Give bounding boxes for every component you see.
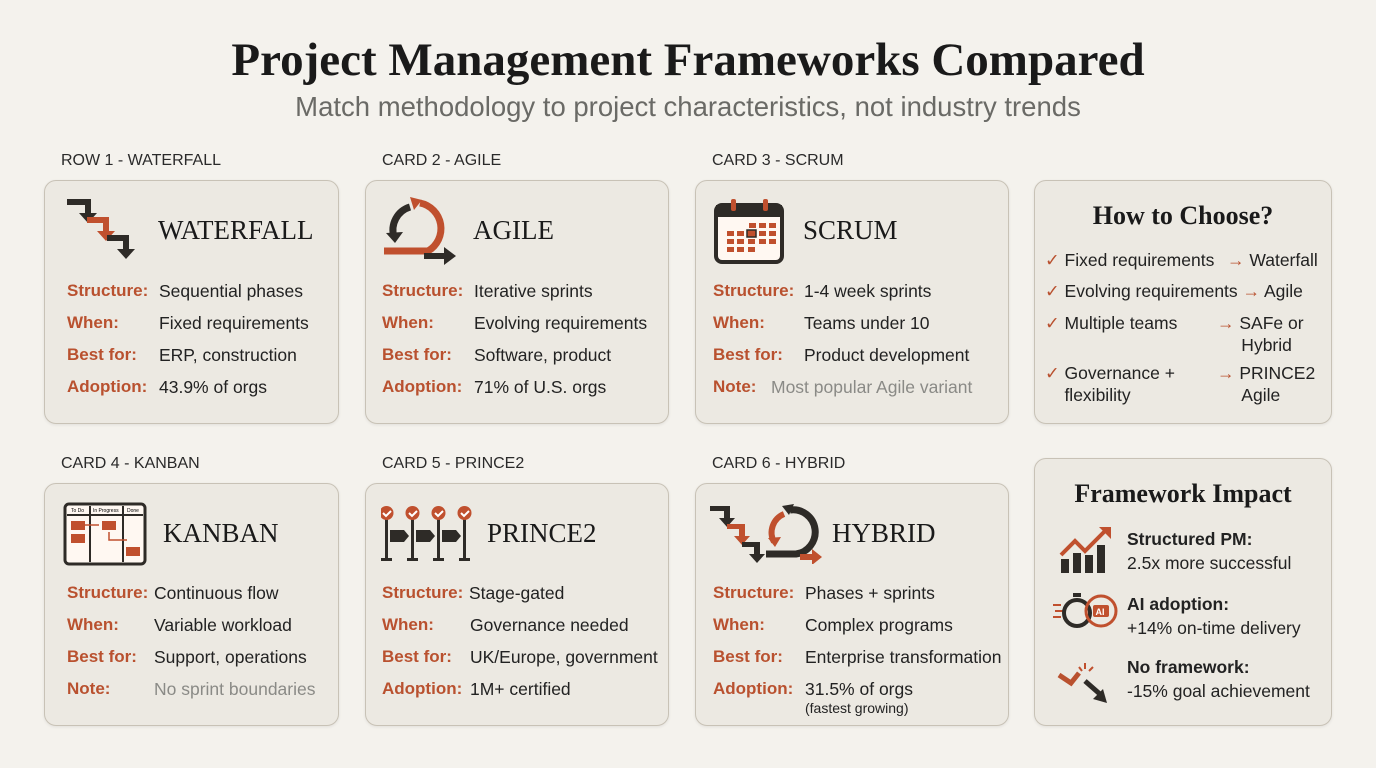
panel: hybrid: Adoption: (713, 679, 793, 698)
label: card 2: CARD 2 - AGILE (382, 152, 501, 169)
icon: calendar (714, 199, 784, 264)
panel: kanban: Best for: (67, 647, 137, 666)
card title: AGILE (473, 215, 554, 245)
panel: agile: Best for: (382, 345, 452, 364)
panel: prince2: UK/Europe, government (470, 647, 658, 667)
panel: scrum: Teams under 10 (804, 313, 930, 333)
panel: scrum: Best for: (713, 345, 783, 364)
panel: framework impact (1034, 458, 1332, 726)
panel: hybrid: Complex programs (805, 615, 953, 635)
panel: kanban: Support, operations (154, 647, 307, 667)
panel: how to choose: ✓ Evolving requirements → Agile (1045, 281, 1303, 301)
panel: prince2: Governance needed (470, 615, 629, 635)
panel: hybrid: (fastest growing) (805, 700, 908, 716)
panel: scrum: 1-4 week sprints (804, 281, 931, 301)
card title: HYBRID (832, 518, 936, 548)
panel: scrum: Most popular Agile variant (771, 377, 972, 397)
panel: how to choose: → Waterfall (1227, 250, 1318, 270)
panel: agile: Adoption: (382, 377, 462, 396)
label: card 3: CARD 3 - SCRUM (712, 152, 844, 169)
heading: How to Choose? (1093, 201, 1273, 230)
stat: ai adoption (1127, 594, 1301, 638)
label: card 5: CARD 5 - PRINCE2 (382, 455, 524, 472)
card title: PRINCE2 (487, 518, 597, 548)
panel: hybrid: Enterprise transformation (805, 647, 1001, 667)
panel: how to choose: → SAFe or (1217, 313, 1304, 333)
panel: kanban: Note: (67, 679, 110, 698)
panel: hybrid (695, 483, 1009, 726)
rows (67, 281, 303, 301)
icon: stage gates (381, 506, 472, 561)
title: Project Management Frameworks Compared (231, 34, 1145, 86)
panel: waterfall: Structure: (67, 281, 148, 300)
label: row 1: ROW 1 - WATERFALL (61, 152, 221, 169)
panel: hybrid: Structure: (713, 583, 794, 602)
card title: KANBAN (163, 518, 279, 548)
icon: agile cycle (384, 197, 456, 265)
panel: how to choose: ✓ Governance + (1045, 363, 1175, 383)
panel: agile (365, 180, 669, 424)
label: card 6: CARD 6 - HYBRID (712, 455, 845, 472)
panel: waterfall: When: (67, 313, 119, 332)
choice rows: ✓ Fixed requirements (1045, 250, 1214, 270)
panel: prince2: Structure: (382, 583, 463, 602)
panel: hybrid: When: (713, 615, 765, 634)
icon: stopwatch AI (1053, 593, 1118, 628)
panel: waterfall: Adoption: (67, 377, 147, 396)
panel: how to choose: flexibility (1064, 385, 1131, 405)
panel: scrum: When: (713, 313, 765, 332)
panel: waterfall: ERP, construction (159, 345, 297, 365)
panel: kanban: Continuous flow (154, 583, 279, 603)
panel: kanban: No sprint boundaries (154, 679, 315, 699)
stat: ai adoption: +14% on-time delivery (1127, 618, 1301, 638)
icon: stopwatch AI: AI (1096, 607, 1104, 617)
icon: kanban board: In Progress (93, 508, 119, 514)
icon: kanban board (64, 502, 146, 566)
panel: how to choose: Hybrid (1241, 335, 1292, 355)
panel: waterfall (44, 180, 339, 424)
label: card 4: CARD 4 - KANBAN (61, 455, 200, 472)
icon: hybrid (710, 504, 822, 564)
panel: waterfall: Fixed requirements (159, 313, 309, 333)
icon: waterfall steps (67, 199, 135, 259)
panel: prince2: Adoption: (382, 679, 462, 698)
panel: waterfall: 43.9% of orgs (159, 377, 267, 397)
stat: no framework: No framework: (1127, 657, 1250, 677)
panel: prince2: Best for: (382, 647, 452, 666)
panel: kanban: Variable workload (154, 615, 292, 635)
panel: kanban (44, 483, 339, 726)
panel: agile: Structure: (382, 281, 463, 300)
heading: Framework Impact (1074, 479, 1292, 508)
stat: ai adoption: AI adoption: (1127, 594, 1229, 614)
panel: agile: When: (382, 313, 434, 332)
panel: prince2: 1M+ certified (470, 679, 571, 699)
icon: kanban board: To Do (71, 508, 84, 514)
panel: scrum: Structure: (713, 281, 794, 300)
panel: kanban: When: (67, 615, 119, 634)
icon: kanban board: Done (127, 508, 139, 514)
icon: rising chart (1060, 527, 1111, 573)
panel: waterfall: Sequential phases (159, 281, 303, 301)
subtitle: Match methodology to project characteristics, not industry trends (295, 91, 1081, 122)
stat: no framework (1127, 657, 1310, 701)
panel: agile: Software, product (474, 345, 611, 365)
panel: hybrid: Best for: (713, 647, 783, 666)
panel: kanban: Structure: (67, 583, 148, 602)
stat: structured pm: Structured PM: (1127, 529, 1252, 549)
panel: hybrid: 31.5% of orgs (805, 679, 913, 699)
panel: prince2 (365, 483, 669, 726)
panel: agile: Iterative sprints (474, 281, 593, 301)
stat: no framework: -15% goal achievement (1127, 681, 1310, 701)
panel: prince2: Stage-gated (469, 583, 564, 603)
panel: scrum: Product development (804, 345, 969, 365)
panel: how to choose: Agile (1241, 385, 1280, 405)
panel: prince2: When: (382, 615, 434, 634)
card title: WATERFALL (158, 215, 314, 245)
card title: SCRUM (803, 215, 898, 245)
panel: waterfall: Best for: (67, 345, 137, 364)
stat: structured pm: 2.5x more successful (1127, 553, 1291, 573)
panel: hybrid: Phases + sprints (805, 583, 935, 603)
panel: how to choose (1034, 180, 1332, 424)
panel: agile: 71% of U.S. orgs (474, 377, 606, 397)
panel: how to choose: → PRINCE2 (1217, 363, 1315, 383)
panel: scrum: Note: (713, 377, 756, 396)
icon: falling arrow (1058, 663, 1107, 703)
panel: scrum (695, 180, 1009, 424)
stat: structured pm (1127, 529, 1291, 573)
panel: how to choose: ✓ Multiple teams (1045, 313, 1177, 333)
panel: agile: Evolving requirements (474, 313, 647, 333)
